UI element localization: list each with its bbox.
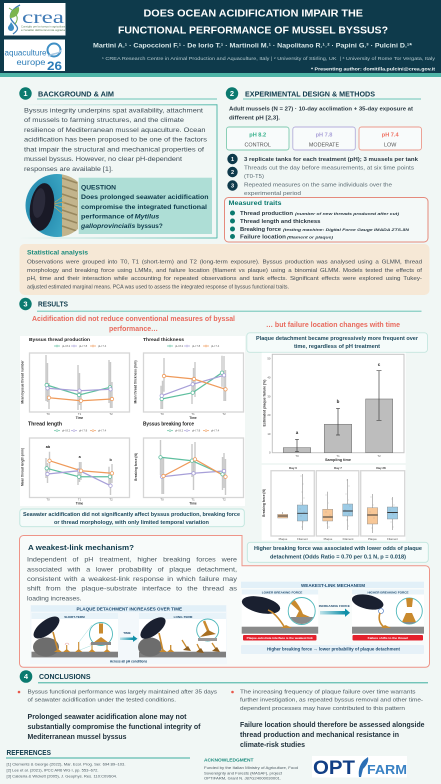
line chart: byssus breaking force: pH 7.4 [211,429,220,433]
title [118,8,388,36]
title: FUNCTIONAL PERFORMANCE OF MUSSEL BYSSUS? [118,24,388,36]
box plots: breaking force by failure location: Filament [297,537,308,541]
callout: question: compromise the integrated functional [81,204,207,211]
box plots: breaking force by failure location: Day 28 [376,466,386,470]
conclusion: left column: of seawater acidification under the tested conditions. [28,698,176,704]
diagram: plaque detachment over time: Across all pH conditions [110,660,147,664]
conclusion: right column: further investigation, as repeated byssus removal and other time- [240,698,423,704]
bar chart: estimated plaque failure: T2 [377,454,381,458]
box plots: breaking force by failure location: Plaque [279,537,288,541]
logo: CREA: crea [22,7,64,27]
higher breaking force scene: Failure shifts to the thread [368,636,408,640]
heading: conventional measures: Acidification did not reduce conventional measures of byssal [32,316,235,323]
section heading: background: 1 [23,89,28,98]
references: [3] Caldeira & Wickett (2005), J. Geophys. Res. 110:C09S04. [6,774,117,778]
logo: Aquaculture Europe 26: europe [16,58,46,67]
background text: that impair the structural and mechanical properties of [24,146,204,154]
weakest-link text: consistent with a weakest-link response in which failure may [27,576,238,583]
treatment: low: LOW [384,142,397,148]
logo: CREA: Consiglio per la ricerca in agricoltura [21,24,66,28]
box: measured traits [224,198,428,242]
long-term scene: LONG-TERM [174,615,193,619]
line chart: byssus thread production: T1 [78,412,82,416]
panel: weakest-link mechanism [20,536,430,667]
section heading: results: RESULTS [38,302,68,309]
section heading: methods: 2 [230,89,234,98]
bar chart: estimated plaque failure: T0 [295,454,299,458]
callout: question: Does prolonged seawater acidification [81,194,208,201]
bar chart: estimated plaque failure: 20 [267,413,271,417]
heading: conventional measures: performance… [109,326,158,333]
acknowledgment: Funded by the Italian Ministry of Agriculture, Food [204,766,298,770]
background text: acidification has been proposed to be one of the factors [24,137,208,144]
background text: Byssus integrity underpins spat availability, attachment [24,108,203,114]
icon: mussel attached to rope [25,173,78,238]
conclusion: right column: The increasing frequency of plaque failure over time warrants [240,689,416,695]
callout: plaque detachment over time: Plaque detachment became progressively more frequent over [256,336,418,342]
design summary: Adult mussels (N = 27) · 10-day acclimation + 35-day exposure at [229,106,413,112]
callout: odds ratio [247,542,428,562]
acknowledgment: OPTIFARM, Grant N. J87G24000030001. [204,777,281,781]
line chart: thread length: b [110,458,113,462]
line chart: byssus thread production: Byssus thread production [29,337,90,342]
line chart: byssus breaking force: Byssus breaking force [143,422,194,428]
short-term scene [30,612,118,658]
references: [1] Clements & George (2022), Mar. Ecol. Prog. Ser. 694:89–103. [6,762,126,766]
references: [2] Lee et al. (2021), IPCC AR6 WG I, pp. 553–672. [6,768,98,772]
box plots: breaking force by failure location: Plaque [368,537,377,541]
callout: odds ratio: detachment (Odds Ratio = 0.70 per 0.1 N, p = 0.018) [270,554,406,560]
bar chart: estimated plaque failure: Sampling time [325,458,351,462]
logo: OPTIFARM: OPT [313,758,355,779]
authors: Martini A.¹ · Capoccioni F.¹ · De Iorio T.¹ · Martinoli M.¹ · Napolitano R.¹˒² · Papini G.³ · Pulcini D.¹* [93,42,413,50]
section heading: conclusions: CONCLUSIONS [39,674,91,681]
diagram: weakest-link mechanism [240,582,424,654]
numbered design steps: 3 [231,184,234,190]
line chart: thread length: T2 [109,497,113,501]
section heading: conclusions [20,670,428,683]
line chart: thread thickness: T1 [191,412,195,416]
title: DOES OCEAN ACIDIFICATION IMPAIR THE [144,8,363,20]
box: measured traits: Failure location [240,234,287,240]
line chart: thread length: T0 [46,497,50,501]
diagram: plaque detachment over time [30,605,227,664]
line chart: thread length: pH 8.2 [62,429,71,433]
conclusion: right column: Failure location should therefore be assessed alongside [240,722,425,729]
presenting author: * Presenting author: domitilla.pulcini@crea.gov.it [311,66,436,72]
callout: no significant effect: or thread morphology, with only limited temporal variation [54,520,209,526]
section heading: methods [226,87,421,100]
numbered design steps: experimental period [244,191,301,197]
section heading: background [19,87,217,100]
conclusion: left column: Byssus functional performance was largely maintained after 35 days [28,689,217,695]
numbered design steps [227,154,419,197]
logo: Aquaculture Europe 26 [4,40,65,73]
lower breaking force scene [240,590,318,640]
logo: CREA [4,3,66,36]
numbered design steps: (T0-T5) [244,174,264,180]
bar chart: estimated plaque failure: Estimated plaque failure (%) [262,380,266,426]
diagram: weakest-link mechanism: WEAKEST-LINK MECHANISM [301,583,366,588]
logo: OPTIFARM [312,756,407,779]
design summary: different pH [2,3]. [229,116,280,122]
weakest-link text [27,557,238,602]
treatment: low: pH 7.4 [382,132,399,138]
background text [24,108,208,173]
summary strip [241,645,424,654]
treatment: low [359,127,422,150]
callout: question: Mytilus [135,214,160,220]
conclusion: left column: Mediterranean mussel byssus [28,734,127,741]
line chart: byssus breaking force: T0 [160,497,164,501]
bar chart: estimated plaque failure: 0 [269,451,271,455]
line chart: byssus breaking force: T2 [222,497,226,501]
box plots: breaking force by failure location: Breaking force (N) [262,489,266,517]
line chart: byssus thread production: pH 7.8 [79,344,88,348]
treatment: control: CONTROL [245,142,271,148]
line chart: thread thickness: pH 7.4 [211,344,220,348]
heading: weakest link: A weakest-link mechanism? [28,543,134,552]
treatment: moderate: pH 7.8 [316,132,332,138]
line chart: thread length: ab [46,445,51,449]
heading: failure location: … but failure location changes with time [266,322,400,329]
conclusion: left column: Prolonged seawater acidification alone may not [28,714,187,721]
line chart: byssus breaking force: Breaking force (N) [134,453,138,481]
line chart: thread thickness: Time [189,416,197,420]
line chart: thread length: Thread length [28,422,62,428]
diagram: plaque detachment over time: PLAQUE DETACHMENT INCREASES OVER TIME [76,606,182,612]
panel: statistical analysis [20,244,430,295]
weakest-link text: Independent of pH treatment, higher breaking forces were [27,557,238,564]
callout: no significant effect: Seawater acidification did not significantly affect byssus production, breaking force [23,512,240,518]
panel: statistical analysis: Observations were grouped into T0, T1 (short-term) and T2 (long-term exposure). Byssus production was analysed using a GLMM, thread [27,260,422,266]
panel: statistical analysis: adjusted estimated marginal means. PCA was used to assess the integrated response of byssus functional traits. [27,284,289,290]
line chart: byssus thread production: Mean byssus thread number [20,360,24,404]
long-term scene [137,613,226,658]
arrow: increasing force [319,604,350,617]
line chart: byssus thread production: pH 8.2 [62,344,71,348]
line chart: thread length: Time [76,502,83,506]
section heading: results [19,298,422,312]
bar chart: estimated plaque failure: 30 [267,395,271,399]
box: measured traits: Measured traits [228,200,282,207]
line chart: thread length: a [79,455,82,459]
line chart: thread thickness: pH 8.2 [175,344,184,348]
box plots: breaking force by failure location: Filament [343,537,354,541]
section heading: background: BACKGROUND & AIM [38,92,114,98]
box: measured traits: Thread production [240,211,294,217]
arrow: time: TIME [123,631,131,635]
box plots: breaking force by failure location: Day 0 [289,466,297,470]
line chart: thread length: pH 7.4 [98,429,107,433]
weakest-link text: associated with a lower probability of plaque detachment, [27,566,237,573]
box: measured traits: Thread length and thickness [240,219,320,225]
callout: question: QUESTION [81,184,116,192]
box: measured traits: (number of new threads produced after cut) [295,211,400,216]
box: measured traits: Breaking force [240,227,281,233]
box plots: breaking force by failure location [262,465,406,541]
callout: plaque detachment over time: time, regardless of pH treatment [294,344,380,350]
line chart: byssus thread production: pH 7.4 [98,344,107,348]
panel: statistical analysis: pH, time and their interaction while accounting for repeated observations and tank effects. Significant effects were explored using Tukey- [27,276,422,282]
arrow: time [120,631,138,642]
callout: odds ratio: Higher breaking force was associated with lower odds of plaque [254,546,422,552]
line chart: byssus thread production: T2 [109,412,113,416]
treatment: control: pH 8.2 [249,132,266,138]
weakest-link text: shift from the plaque-substrate interface to the thread as [27,586,237,593]
callout: plaque detachment over time [247,333,428,352]
line chart: byssus breaking force: T1 [191,497,195,501]
callout: question: performance of [81,214,134,220]
section heading: results: 3 [23,300,28,309]
callout: no significant effect [20,509,244,527]
numbered design steps: 1 [231,157,234,163]
line chart: thread thickness: T2 [222,412,226,416]
conclusion: right column [231,689,425,749]
callout: question: byssus? [137,223,163,230]
short-term scene: SHORT-TERM [64,615,85,619]
line chart: thread length: pH 7.8 [79,429,88,433]
logo: OPTIFARM: FARM [367,762,407,777]
higher breaking force scene [351,590,424,640]
line chart: byssus thread production: Time [76,416,83,420]
box: measured traits: (testing machine: Digital Force Gauge IMADA ZTS-5N [283,227,409,232]
line chart: thread length: Mean thread length (mm) [20,448,24,486]
background text: responses are available [1]. [24,166,113,173]
background text: resilience of Mediterranean mussel aquaculture. Ocean [24,127,206,134]
callout: question: galloprovincialis [80,223,136,230]
line chart: thread thickness: T0 [160,412,164,416]
conclusion: right column: climate-risk studies [240,742,305,749]
header banner [0,0,441,77]
conclusion: right column: dependent processes may have contributed to this pattern [240,706,405,712]
line chart: thread thickness: Thread thickness [143,337,185,342]
line chart: thread length [20,422,130,506]
box plots: breaking force by failure location: Day 7 [334,466,342,470]
numbered design steps: 2 [231,170,234,176]
panel: statistical analysis: Statistical analysis [27,250,88,256]
design summary [229,106,413,122]
weakest-link text: loading increases. [27,595,82,602]
box plots: breaking force by failure location: Plaque [324,537,333,541]
line chart: byssus breaking force: Time [189,502,197,506]
arrow: increasing force: INCREASING FORCE [319,604,350,608]
bar chart: estimated plaque failure: a [296,430,299,435]
line chart: thread length: T1 [78,497,82,501]
line chart: byssus thread production [20,337,130,420]
box: measured traits: (filament or plaque) [287,234,334,240]
acknowledgment [204,758,298,781]
bar chart: estimated plaque failure: 40 [267,376,271,380]
panel: statistical analysis: morphology and breaking force using LMMs, and failure location (filament vs plaque) using a binomial GLMM. Models tested the effects of [27,268,423,274]
acknowledgment: Sovereignty and Forests (MASAF), project [204,771,282,775]
callout: question [79,178,212,234]
numbered design steps: Repeated measures on the same individuals over the [244,182,392,188]
bar chart: estimated plaque failure: b [337,399,340,404]
treatment: control [226,127,289,150]
numbered design steps: 3 replicate tanks for each treatment (pH); 3 mussels per tank [244,157,419,163]
line chart: thread thickness: Mean thread thickness (mm) [134,360,138,404]
line chart: byssus breaking force [134,422,244,506]
background text: mussel byssus. However, no clear pH-dependent [24,156,182,163]
lower breaking force scene: Plaque-substrate interface is the weakest link [247,636,313,640]
bar chart: estimated plaque failure: 10 [267,432,271,436]
numbered design steps: Threads cut the day before measurements, at six time points [244,166,414,172]
conclusion: left column [18,689,217,741]
conclusion: left column: substantially compromise the functional integrity of [28,724,201,731]
line chart: byssus breaking force: pH 7.8 [192,429,201,433]
summary strip: Higher breaking force → lower probability of plaque detachment [267,647,400,652]
line chart: thread thickness [134,337,244,420]
references [6,750,190,778]
lower breaking force scene: LOWER BREAKING FORCE [262,590,302,594]
panel: experimental design and methods [224,87,428,242]
bar chart: estimated plaque failure [262,353,406,463]
acknowledgment: ACKNOWLEDGMENT [204,758,254,763]
line chart: byssus breaking force: pH 8.2 [175,429,184,433]
references: REFERENCES [6,750,51,757]
panel: background and aim [19,87,218,238]
background text: of mussels to farming structures, and the climate [24,117,184,124]
bar chart: estimated plaque failure: c [378,362,381,367]
higher breaking force scene: HIGHER BREAKING FORCE [367,590,409,594]
treatment: moderate: MODERATE [309,142,339,148]
bar chart: estimated plaque failure: T1 [336,454,340,458]
logo: Aquaculture Europe 26: aquaculture [4,48,47,58]
charts panel: four line charts [20,336,245,506]
logo: Aquaculture Europe 26: 26 [47,61,62,73]
line chart: byssus thread production: T0 [46,412,50,416]
logo: CREA: e l'analisi dell'economia agraria [21,28,66,32]
section heading: conclusions: 4 [24,672,29,681]
section heading: methods: EXPERIMENTAL DESIGN & METHODS [245,92,375,98]
box plots: breaking force by failure location: Filament [387,537,398,541]
heading: conventional measures [32,316,235,333]
conclusion: right column: thread production and mechanical resistance in [240,732,399,739]
line chart: thread thickness: pH 7.8 [192,344,201,348]
bar chart: estimated plaque failure: 50 [267,357,271,361]
treatment: moderate [293,127,355,150]
affiliations: ¹ CREA Research Centre in Animal Production and Aquaculture, Italy | ² University of Stirling, UK | ³ University of Rome Tor Vergata, Italy [102,56,436,61]
